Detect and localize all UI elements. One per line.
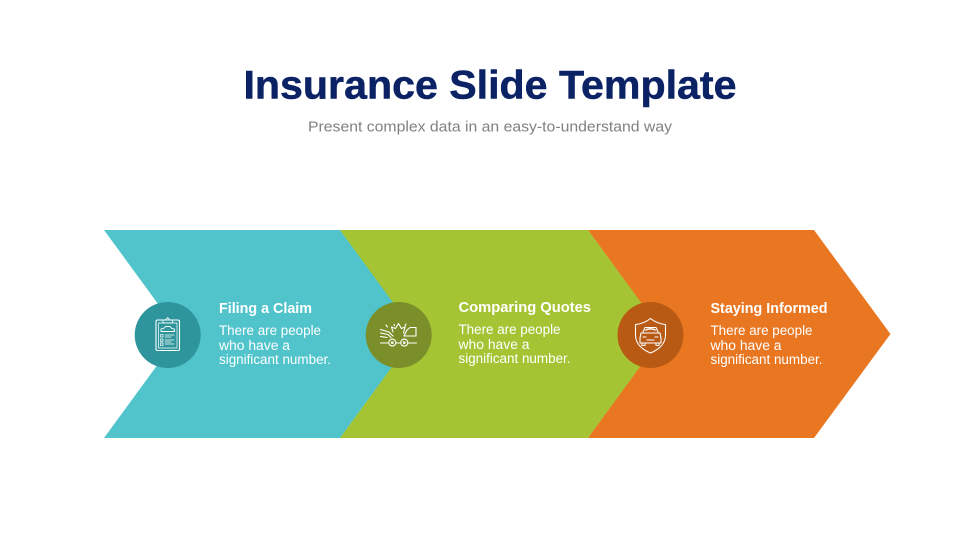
subtitle: Present complex data in an easy-to-understand way <box>308 120 673 136</box>
title: Insurance Slide Template <box>244 64 736 108</box>
step 2 body: who have a <box>457 337 530 352</box>
green icon circle <box>366 302 432 368</box>
step 2 heading: Comparing Quotes <box>458 299 591 316</box>
step 1 body: who have a <box>218 338 290 353</box>
step 2 body: significant number. <box>458 351 570 366</box>
orange arrow <box>588 230 890 438</box>
icon: car crash <box>380 324 416 346</box>
step 3 body: significant number. <box>710 352 822 367</box>
step 1 heading: Filing a Claim <box>219 300 312 317</box>
teal chevron <box>104 230 416 438</box>
step 3 body: There are people <box>710 323 812 338</box>
teal icon circle <box>135 302 201 368</box>
step 1 body: There are people <box>219 323 321 338</box>
icon: shield with car <box>636 318 666 353</box>
panel: comparing quotes <box>340 230 664 438</box>
icon: clipboard with car <box>156 318 180 350</box>
step 2 body: There are people <box>458 322 560 337</box>
green chevron <box>340 230 664 438</box>
orange icon circle <box>618 302 684 368</box>
step 1 body: significant number. <box>219 352 331 367</box>
step 3 body: who have a <box>709 338 782 353</box>
panel: staying informed <box>588 230 890 438</box>
step 3 heading: Staying Informed <box>710 300 828 317</box>
panel: filing a claim <box>104 230 416 438</box>
